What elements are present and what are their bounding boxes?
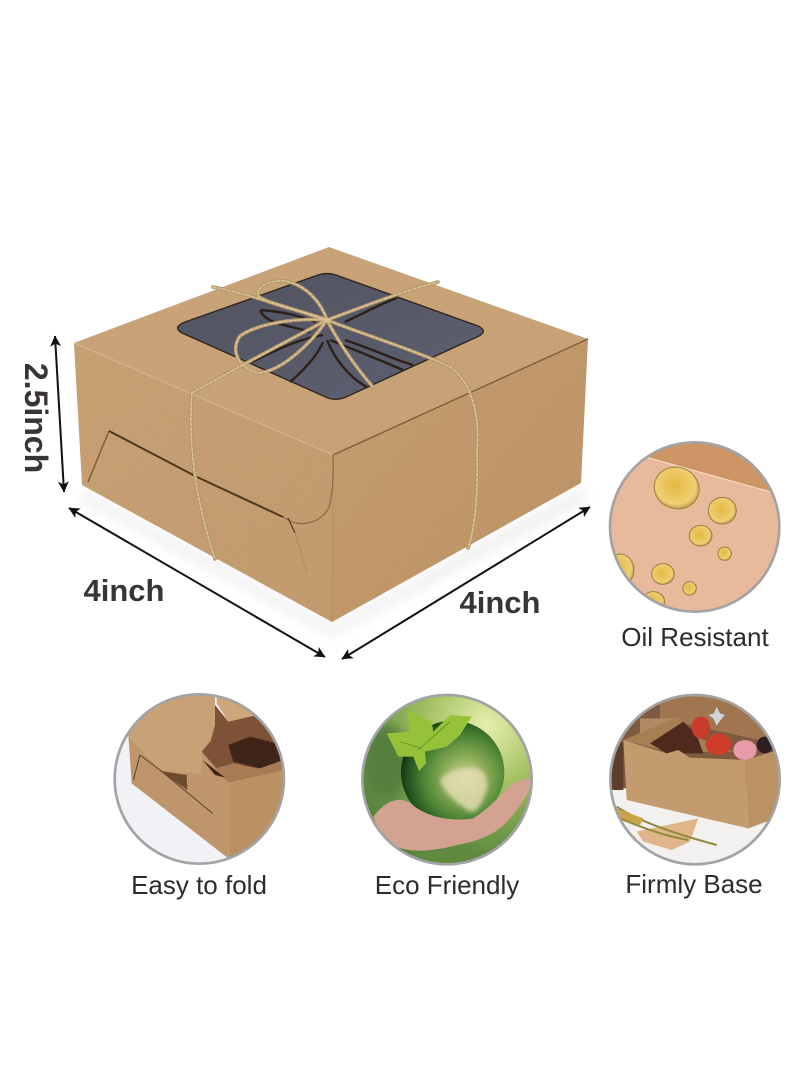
photo: filled open box with strawberries: [612, 696, 778, 863]
product photo: kraft box with window and twine: [74, 247, 588, 636]
dimension label: height: 2.5inch: [18, 363, 54, 473]
dimension label: right width: 4inch: [460, 585, 540, 620]
box lid edges and tuck flap: [74, 339, 588, 622]
twine: [191, 281, 478, 559]
label: eco friendly: Eco Friendly: [375, 870, 519, 900]
label: easy to fold: Easy to fold: [131, 870, 267, 900]
photo: globe in hand: [364, 696, 530, 863]
photo: partly folded box: [113, 692, 287, 867]
feature: oil resistant: [606, 437, 787, 613]
dimension: height arrow: [55, 336, 64, 492]
feature: eco friendly: [360, 693, 537, 872]
bow shadow inside window: [252, 298, 413, 387]
infographic canvas: [24, 247, 781, 900]
window: [178, 274, 483, 399]
photo: oil droplets on kraft paper: [611, 444, 778, 610]
label: oil resistant: Oil Resistant: [621, 622, 769, 652]
dimension label: left width: 4inch: [84, 573, 164, 608]
feature: firmly base: [607, 692, 783, 868]
box body: [74, 247, 588, 622]
feature: easy to fold: [113, 692, 287, 867]
dimension: left width arrow: [69, 508, 325, 657]
ground shadow: [82, 488, 586, 636]
dimension: right width arrow: [342, 507, 590, 659]
label: firmly base: Firmly Base: [625, 869, 763, 899]
